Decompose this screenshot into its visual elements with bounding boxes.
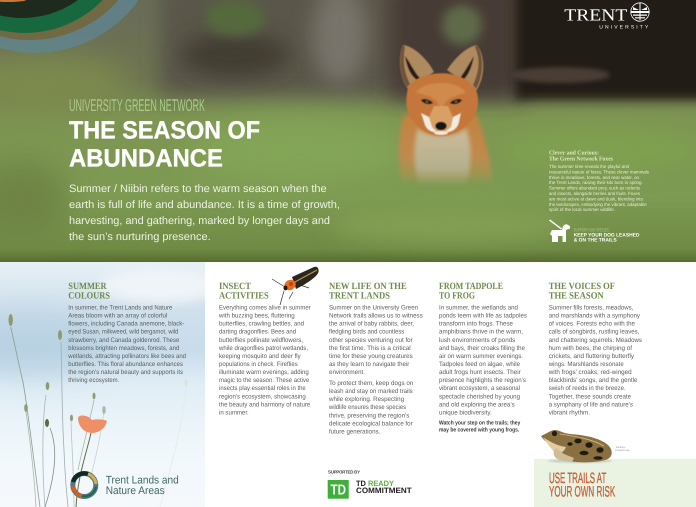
body text: in summer. (219, 409, 249, 416)
fox article body: and insects, alongside berries and fruits. Foxes (549, 191, 641, 196)
body text: blackbirds’ songs, and the gentle (549, 377, 638, 384)
panel: insect activities (218, 281, 312, 416)
body text: other species venturing out for (329, 337, 414, 344)
heading: THE SEASON (549, 290, 604, 301)
fox article body: The summer time reveals the playful and (549, 164, 629, 169)
logo: Trent Lands and Nature Areas (73, 473, 179, 497)
body text: region’s ecosystem, showcasing (219, 393, 306, 400)
body text: transform into frogs. These (439, 321, 513, 328)
body text: insects play essential roles in the (219, 385, 306, 392)
body text: and marshlands with a symphony (549, 313, 641, 320)
fox article body: resourceful nature of foxes. These clever mammals (549, 169, 650, 174)
fox article (549, 150, 650, 212)
logo wordmark (106, 474, 179, 497)
callout: keep your dog leashed (574, 227, 640, 244)
body text: while dragonflies patrol wetlands, (218, 345, 308, 352)
body text (439, 304, 527, 416)
panel: from tadpole to frog (439, 281, 527, 434)
body text: flowers, including Canada anemone, black- (68, 321, 184, 328)
body text: Everything comes alive in summer (219, 304, 312, 312)
body text: lush environments of ponds (439, 337, 515, 344)
heading: INSECT (219, 281, 252, 292)
body text: the beauty and harmony of nature (219, 401, 311, 408)
fox article heading: The Green Network Foxes (549, 156, 614, 162)
fox body (399, 115, 494, 186)
body text: In summer, the Trent Lands and Nature (68, 304, 173, 312)
fox head (406, 73, 478, 136)
body text: vibrant rhythm. (549, 409, 590, 416)
heading: NEW LIFE ON THE (329, 281, 407, 292)
body text: and bays, their croaks filling the (439, 345, 525, 352)
heading (549, 281, 615, 301)
heading: FROM TADPOLE (439, 281, 503, 292)
body text: In summer, the wetlands and (439, 304, 518, 312)
supported by label: SUPPORTED BY (328, 470, 360, 475)
body text: ponds teem with life as tadpoles (439, 313, 527, 320)
body text: leash and stay on marked trails (329, 388, 413, 395)
body text: while exploring. Respecting (328, 396, 404, 403)
fox ears (400, 45, 483, 91)
body text (218, 304, 312, 416)
body text: eyed Susan, milkweed, wild bergamot, wild (68, 329, 179, 336)
heading: TO FROG (439, 290, 475, 301)
body text: environment. (329, 369, 365, 376)
body text: and old exploring the area’s (439, 401, 515, 408)
body text: future generations. (329, 428, 381, 435)
body text: populations in check. Fireflies (219, 361, 298, 368)
fox article body: the Trent Lands, raising their kits born in spring. (549, 180, 643, 185)
fox article heading (549, 150, 614, 162)
body text: darting dragonflies. Bees and (219, 329, 296, 336)
heading (329, 281, 407, 301)
icon: leashed dog (549, 220, 570, 242)
body text (548, 304, 642, 416)
body text: with buzzing bees, fluttering (218, 313, 295, 320)
body text: of voices. Forests echo with the (549, 321, 635, 328)
body text: wings. Marshlands resonate (548, 361, 624, 368)
intro paragraph: the sun’s nurturing presence. (69, 231, 211, 243)
body text: spectacle cherished by young (439, 393, 520, 400)
body text (328, 304, 423, 435)
title: ABUNDANCE (69, 145, 223, 173)
body text: delicate ecological balance for (329, 420, 414, 427)
body text: as they learn to navigate their (329, 361, 410, 368)
body text: a symphany of life and nature’s (549, 401, 633, 408)
sponsor wordmark (356, 479, 412, 495)
photo credit: frog: Northern (616, 446, 626, 449)
Trent University logo (564, 3, 649, 30)
photo: red fox (399, 45, 494, 186)
body text: swish of reeds in the breeze. (549, 385, 626, 392)
Trent University logo: TRENT (564, 6, 628, 25)
fox chest (414, 128, 471, 186)
body text: thriving ecosystem. (68, 377, 120, 384)
body text (67, 304, 186, 384)
callout: watch your step (439, 419, 521, 434)
heading (219, 281, 269, 301)
body text: Tadpoles feed on algae, while (439, 361, 520, 368)
title: THE SEASON OF (69, 116, 260, 144)
intro paragraph: harvesting, and gathering, marked by longer days and (69, 215, 330, 227)
fox article body (549, 164, 650, 212)
body text: thrive, preserving the region’s (329, 412, 409, 419)
fox muzzle (429, 106, 453, 132)
body text: Summer fills forests, meadows, (549, 304, 634, 312)
body text: Together, these sounds create (549, 393, 631, 400)
body text: butterflies pollinate wildflowers, (219, 337, 303, 344)
icon: firefly (272, 267, 319, 305)
callout: keep your dog leashed: & ON THE TRAILS (574, 238, 617, 244)
photo credit: frog: Leopard Frog (615, 449, 630, 452)
body text: butterflies. This floral abundance enhances (68, 361, 183, 368)
callout: watch your step: Watch your step on the trails; they (439, 419, 521, 426)
icon: leopard frog (541, 430, 612, 463)
sponsor wordmark: TD READY (356, 479, 395, 488)
body text: the arrival of baby rabbits, deer, (329, 321, 414, 328)
heading (439, 281, 503, 301)
photo credit: frog (615, 446, 630, 452)
body text: keeping mosquito and deer fly (219, 353, 301, 360)
heading: THE VOICES OF (549, 281, 615, 292)
body text: butterflies, crawling bettles, and (219, 321, 304, 328)
body text: the first time. This is a critical (329, 345, 411, 352)
body text: strawberry, and Canada goldenrod. These (68, 337, 180, 344)
sponsor wordmark: COMMITMENT (356, 486, 412, 495)
Trent University logo: UNIVERSITY (599, 24, 649, 30)
intro paragraph: Summer / Niibin refers to the warm season when the (69, 183, 327, 195)
heading: TRENT LANDS (329, 290, 390, 301)
wildflower stems (11, 327, 186, 507)
fox article body: are most active at dawn and dusk, blending into (549, 196, 643, 201)
poppy stem (76, 433, 91, 507)
body text: To protect them, keep dogs on (329, 380, 414, 387)
fox article body: Summer offers abundant prey, such as rodents (549, 186, 641, 191)
fox article body: the landscapes, embodying the vibrant, adaptable (549, 202, 647, 207)
body text: amphibians thrive in the warm, (439, 329, 523, 336)
intro paragraph (69, 183, 340, 243)
body text: calls of songbirds, rustling leaves, (549, 329, 640, 336)
heading (68, 281, 110, 301)
panel: use trails warning: USE TRAILS AT (549, 470, 606, 487)
body text: hum with bees, the chirping of (549, 345, 632, 352)
fox forehead (416, 83, 466, 106)
body text: vibrant ecosystem, a seasonal (439, 385, 520, 392)
fox eyes and nose (421, 99, 462, 130)
logo wordmark: Nature Areas (106, 485, 165, 497)
panel: use trails warning: YOUR OWN RISK (549, 484, 615, 501)
body text: wetlands, attracting pollinators like bees and (67, 353, 186, 360)
logo wordmark: Trent Lands and (106, 474, 179, 486)
sponsor: TD Ready Commitment (328, 470, 412, 499)
ring emblem (73, 473, 96, 496)
heading: university green network: UNIVERSITY GREEN NETWORK (69, 96, 205, 115)
poppy flower (78, 416, 107, 433)
callout: keep your dog leashed: SUPPORT OUR SPECIES: (574, 227, 610, 232)
heading: COLOURS (68, 290, 110, 301)
callout: watch your step: may be covered with young frogs. (439, 427, 520, 434)
panel: sky and wildflowers background (0, 262, 220, 507)
body text: and chattering squirrels. Meadows (549, 337, 642, 344)
body text: presence highlights the region’s (439, 377, 526, 384)
body text: time for these young creatures (329, 353, 413, 360)
body text: with frogs’ croaks, red-winged (548, 369, 632, 376)
body text: magic to the season. These active (219, 377, 310, 384)
panel: use trails warning (534, 459, 696, 507)
body text: illuminate warm evenings, adding (219, 369, 309, 376)
flower buds (8, 314, 188, 427)
heading: SUMMER (68, 281, 108, 292)
TD logo: TD (330, 482, 346, 498)
body text: crickets, and fluttering butterfly (549, 353, 635, 360)
body text: Areas bloom with an array of colorful (68, 313, 167, 320)
fox article body: spirit of the local summer wildlife. (549, 207, 615, 212)
panel: the voices of the season (548, 281, 642, 416)
heading: ACTIVITIES (219, 290, 269, 301)
hero photo background (0, 0, 696, 262)
panel: summer colours (67, 281, 186, 384)
intro paragraph: earth is full of life and abundance. It is a time of growth, (69, 199, 340, 211)
body text: adult frogs hunt insects. Their (439, 369, 522, 376)
body text: unique biodiversity. (439, 409, 492, 416)
callout: keep your dog leashed: KEEP YOUR DOG LEASHED (574, 232, 640, 238)
top-left ring logo crop (0, 0, 163, 53)
body text: blossoms brighten meadows, forests, and (68, 345, 180, 352)
body text: Summer on the University Green (329, 304, 418, 312)
panel: new life on the trent lands (328, 281, 423, 435)
body text: air on warm summer evenings. (439, 353, 523, 360)
body text: Network trails allows us to witness (329, 313, 423, 320)
fox article body: thrive in meadows, forests, and near water, on (549, 175, 639, 180)
fox article heading: Clever and Curious: (549, 150, 599, 156)
body text: wildlife ensures these species (328, 404, 406, 411)
body text: the region’s natural beauty and supports its (68, 369, 183, 376)
body text: fledgling birds and countless (329, 329, 404, 336)
title (69, 116, 260, 173)
